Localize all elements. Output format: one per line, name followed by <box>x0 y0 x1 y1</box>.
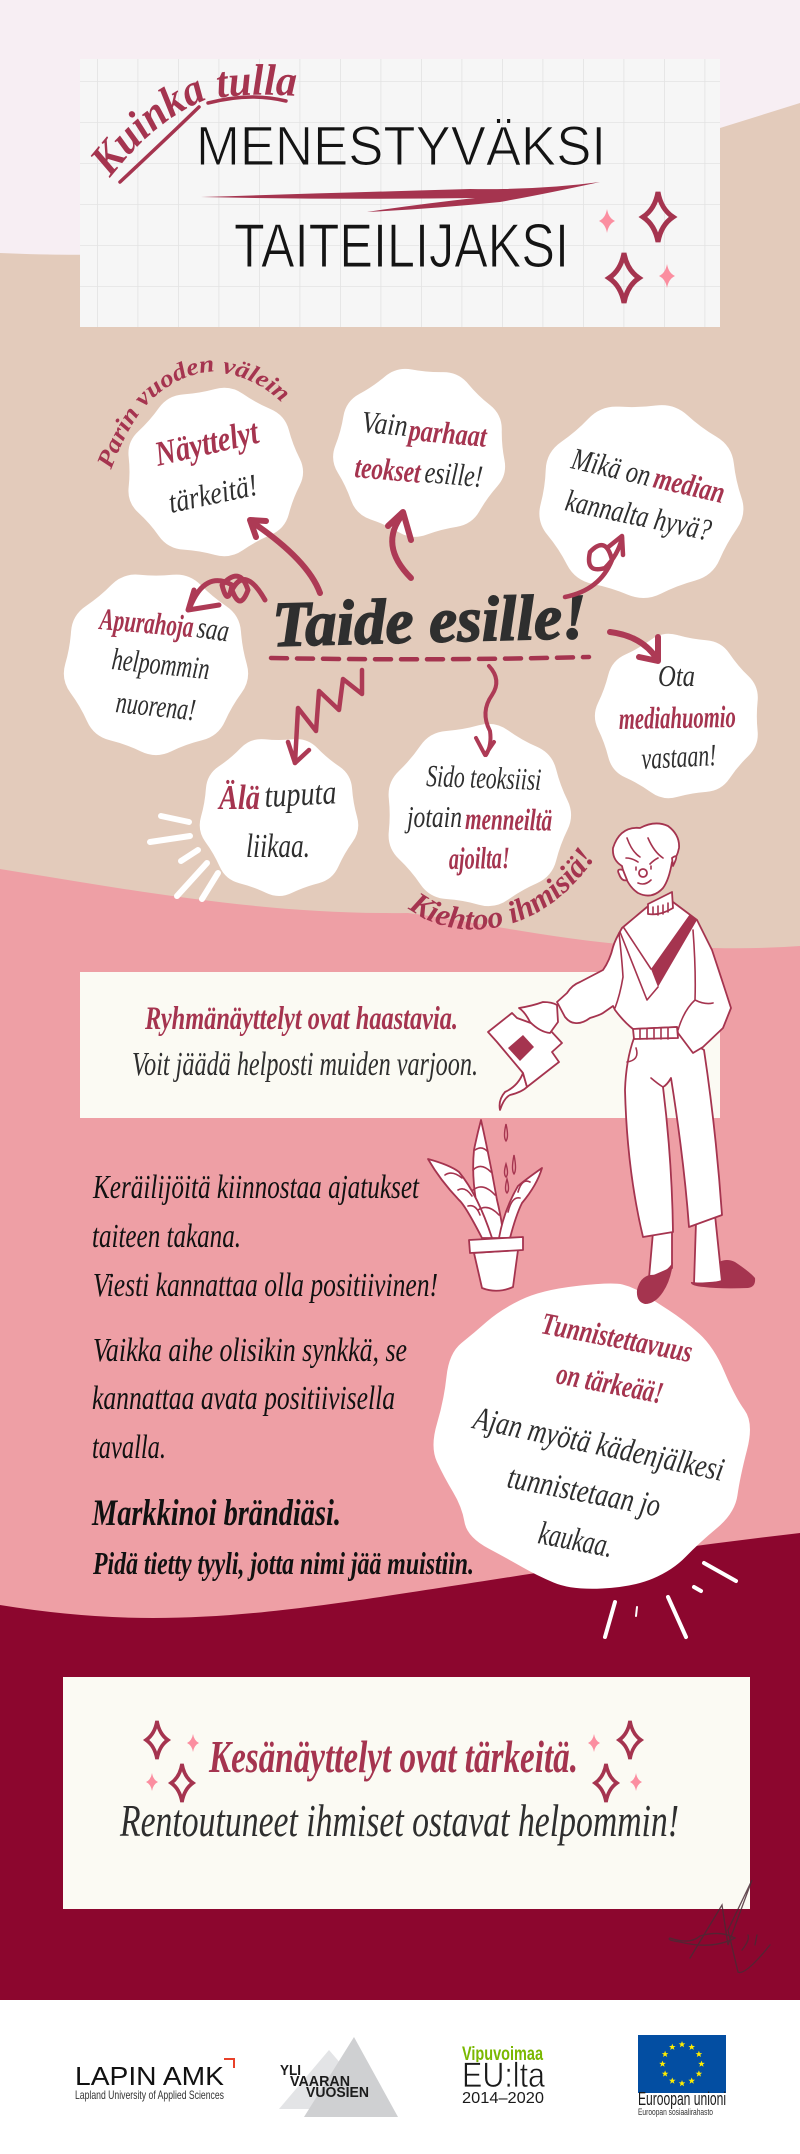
title kicker: Kuinka tulla: Kuinka tulla <box>90 64 296 178</box>
belt <box>633 1027 678 1039</box>
brush stroke <box>201 182 600 212</box>
mind map: bubble Sido teoksiisi: Sido teoksiisi <box>426 758 542 797</box>
zigzag arrow to Älä <box>288 670 362 763</box>
logo: European Union flag: Euroopan unioni <box>638 2089 726 2109</box>
title line: Taiteilijaksi: TAITEILIJAKSI <box>234 212 569 281</box>
logo: European Union flag: Euroopan sosiaalirahasto <box>638 2107 713 2117</box>
text block: positive opening: kannattaa avata positiivisella <box>92 1380 395 1417</box>
text block: positive opening: Vaikka aihe olisikin synkkä, se <box>93 1332 407 1369</box>
logo: Yli vaaran vuosien: VAARAN <box>290 2074 350 2090</box>
logo: Lapin AMK: LAPIN AMK <box>75 2061 225 2091</box>
mind map: bubble Vain parhaat: Vain <box>360 404 409 443</box>
watering can <box>488 1002 562 1110</box>
sparkles <box>599 192 675 303</box>
mind map: bubble Sido teoksiisi <box>389 724 571 906</box>
mind map: bubble Näyttelyt: Näyttelyt <box>150 412 263 474</box>
background: pale top <box>0 0 800 400</box>
callout bubble: Tunnistettavuus <box>434 1284 750 1589</box>
summer exhibitions heading: Kesänäyttelyt ovat tärkeitä. <box>208 1731 578 1782</box>
head <box>613 823 679 896</box>
mind map: bubble Mikä on median <box>529 391 757 610</box>
panel: group exhibitions <box>80 972 720 1118</box>
mind map: bubble Vain parhaat: teokset <box>353 449 423 490</box>
logo: Vipuvoimaa EU:lta: EU:lta <box>462 2056 545 2095</box>
logo: Vipuvoimaa EU:lta <box>462 2044 545 2107</box>
panel: summer exhibitions <box>63 1677 750 1909</box>
callout bubble: Tunnistettavuus: kaukaa. <box>535 1516 616 1565</box>
logo: Vipuvoimaa EU:lta: 2014–2020 <box>462 2090 544 2107</box>
mind map: bubble Älä tuputa: liikaa. <box>246 828 310 865</box>
background: beige section <box>0 103 800 960</box>
logo: European Union flag <box>638 2035 726 2117</box>
mind map: bubble Sido teoksiisi: ajoilta! <box>449 840 510 876</box>
sweater <box>557 902 731 1053</box>
logo: Vipuvoimaa EU:lta: Vipuvoimaa <box>462 2044 543 2065</box>
mind map: bubble Apurahoja: nuorena! <box>114 684 197 727</box>
mind map: bubble Vain parhaat: esille! <box>423 454 484 494</box>
text block: collectors: Keräilijöitä kiinnostaa ajatukset <box>92 1169 420 1206</box>
sparkles right <box>588 1721 642 1802</box>
collar <box>648 892 673 914</box>
mind map: bubble Apurahoja: saa <box>195 609 232 648</box>
arrow to Näyttelyt <box>250 520 320 593</box>
callout bubble: Tunnistettavuus: on tärkeää! <box>554 1356 666 1410</box>
mind map: bubble Ota mediahuomio <box>575 611 784 822</box>
text block: brand: Pidä tietty tyyli, jotta nimi jää muistiin. <box>92 1545 474 1581</box>
text block: brand: Markkinoi brändiäsi. <box>91 1493 341 1534</box>
sparkles left <box>146 1721 199 1802</box>
mind map: bubble Näyttelyt: tärkeitä! <box>165 467 260 520</box>
signature <box>669 1880 770 1972</box>
mind map: bubble Ota mediahuomio: vastaan! <box>641 737 717 776</box>
background: dark red section <box>0 1533 800 2000</box>
mind map: bubble Älä tuputa <box>189 725 372 908</box>
curved label: Kiehtoo ihmisiä!: Kiehtoo ihmisiä! <box>408 846 592 930</box>
arrow to Vain parhaat <box>388 512 411 578</box>
logo: Lapin AMK: Lapland University of Applied Sciences <box>75 2088 224 2102</box>
callout bubble: Tunnistettavuus: Ajan myötä kädenjälkesi <box>469 1400 727 1489</box>
text block: brand <box>91 1493 474 1581</box>
illustration: potted plant <box>428 1120 542 1291</box>
water drops <box>504 1124 516 1193</box>
footer background <box>0 2000 800 2154</box>
curved label: Parin vuoden välein: Parin vuoden välein <box>98 360 288 470</box>
white accent rays near callout <box>605 1563 736 1637</box>
mind map: bubble Vain parhaat <box>317 350 526 555</box>
looped arrow to Mikä <box>565 536 623 597</box>
text block: collectors <box>92 1169 438 1304</box>
callout bubble: Tunnistettavuus: Tunnistettavuus <box>539 1306 696 1369</box>
mind map: bubble Mikä on median: Mikä on <box>568 441 654 493</box>
title line: Menestyväksi: MENESTYVÄKSI <box>196 114 606 177</box>
group exhibitions heading: Ryhmänäyttelyt ovat haastavia. <box>144 1001 458 1037</box>
trousers <box>625 1034 722 1237</box>
mind map: bubble Älä tuputa: tuputa <box>263 774 337 815</box>
sash <box>651 914 697 987</box>
mind map: bubble Älä tuputa: Älä <box>217 778 260 817</box>
mind map: bubble Apurahoja <box>52 558 264 769</box>
white accent rays near Älä <box>150 816 218 899</box>
mind map: bubble Mikä on median: median <box>650 460 728 510</box>
text block: collectors: Viesti kannattaa olla positiivinen! <box>93 1267 438 1304</box>
mind map: bubble Mikä on median: kannalta hyvä? <box>563 483 715 548</box>
wavy arrow to Sido <box>476 666 496 755</box>
mind map: bubble Sido teoksiisi: jotain <box>404 799 462 834</box>
dashed divider <box>271 657 589 659</box>
logo: Yli vaaran vuosien: VUOSIEN <box>306 2085 369 2101</box>
logo: Lapin AMK <box>75 2059 234 2102</box>
mind map: bubble Ota mediahuomio: mediahuomio <box>619 699 736 736</box>
central heading: Taide esille!: Taide esille! <box>272 581 587 660</box>
mind map: bubble Sido teoksiisi: menneiltä <box>465 801 552 838</box>
text block: collectors: taiteen takana. <box>92 1218 241 1255</box>
logo: Yli vaaran vuosien <box>279 2037 398 2117</box>
arrow to Ota mediahuomio <box>610 632 658 661</box>
illustration: person watering plant <box>488 823 755 1304</box>
group exhibitions text: Voit jäädä helposti muiden varjoon. <box>132 1046 478 1083</box>
logo: Yli vaaran vuosien: YLI <box>280 2063 301 2079</box>
callout bubble: Tunnistettavuus: tunnistetaan jo <box>504 1460 663 1524</box>
text block: positive opening <box>92 1332 407 1466</box>
mind map: bubble Apurahoja: Apurahoja <box>97 601 195 644</box>
text block: positive opening: tavalla. <box>92 1429 166 1466</box>
mind map: bubble Vain parhaat: parhaat <box>405 412 489 454</box>
legs and shoes <box>637 1215 755 1304</box>
hand <box>519 1002 558 1033</box>
mind map: bubble Ota mediahuomio: Ota <box>658 658 695 693</box>
mind map: bubble Näyttelyt <box>128 388 303 556</box>
mind map: bubble Apurahoja: helpommin <box>110 641 211 686</box>
swirl arrow to Apurahoja <box>188 576 265 610</box>
background: pink section <box>0 869 800 1700</box>
title panel <box>80 59 720 327</box>
